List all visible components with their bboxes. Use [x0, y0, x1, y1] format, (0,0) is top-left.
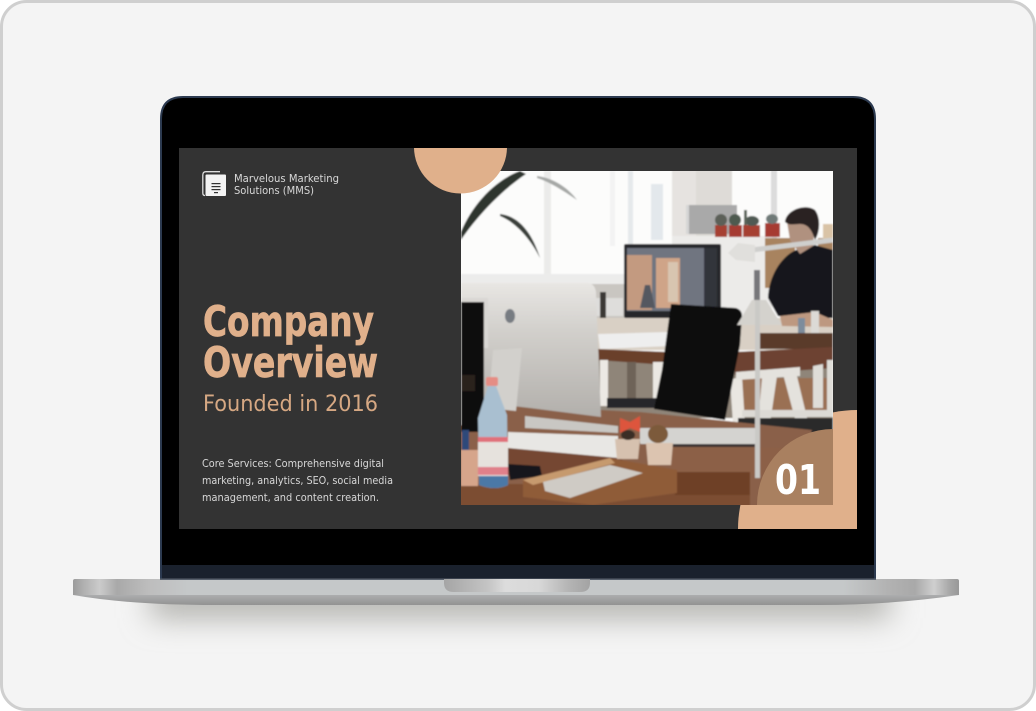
lamp [752, 240, 833, 250]
cactus pots [615, 439, 640, 459]
person [768, 245, 833, 322]
company name: Marvelous Marketing [234, 173, 339, 185]
icon: document logo [203, 172, 226, 196]
title: Company [203, 297, 374, 346]
windows [461, 171, 833, 429]
back monitor [624, 244, 721, 318]
company name: Solutions (MMS) [234, 185, 314, 197]
base notch [444, 579, 590, 592]
laptop base [73, 578, 959, 605]
plant leaves [461, 171, 526, 240]
company name [234, 173, 339, 197]
water bottle [461, 450, 478, 486]
tray [523, 458, 677, 505]
slide panel [179, 148, 857, 529]
wall and wood panel [672, 236, 772, 316]
chair [654, 304, 742, 420]
iMac back [461, 283, 601, 417]
foreground desk [450, 405, 812, 510]
laptop shadow [150, 585, 890, 618]
number badge [757, 429, 833, 505]
number 01: 01 [775, 456, 821, 504]
laptop lid [160, 96, 876, 580]
office photo [461, 171, 833, 505]
subtitle: Founded in 2016 [203, 391, 378, 417]
core services text: management, and content creation. [202, 492, 379, 504]
core services text [202, 458, 393, 504]
corner quarter circle [738, 410, 857, 529]
top circle [414, 148, 507, 194]
potted plants [715, 225, 727, 237]
core services text: Core Services: Comprehensive digital [202, 458, 384, 470]
title: Overview [203, 338, 378, 387]
title [203, 297, 378, 387]
back desk [595, 318, 833, 350]
core services text: marketing, analytics, SEO, social media [202, 475, 393, 487]
